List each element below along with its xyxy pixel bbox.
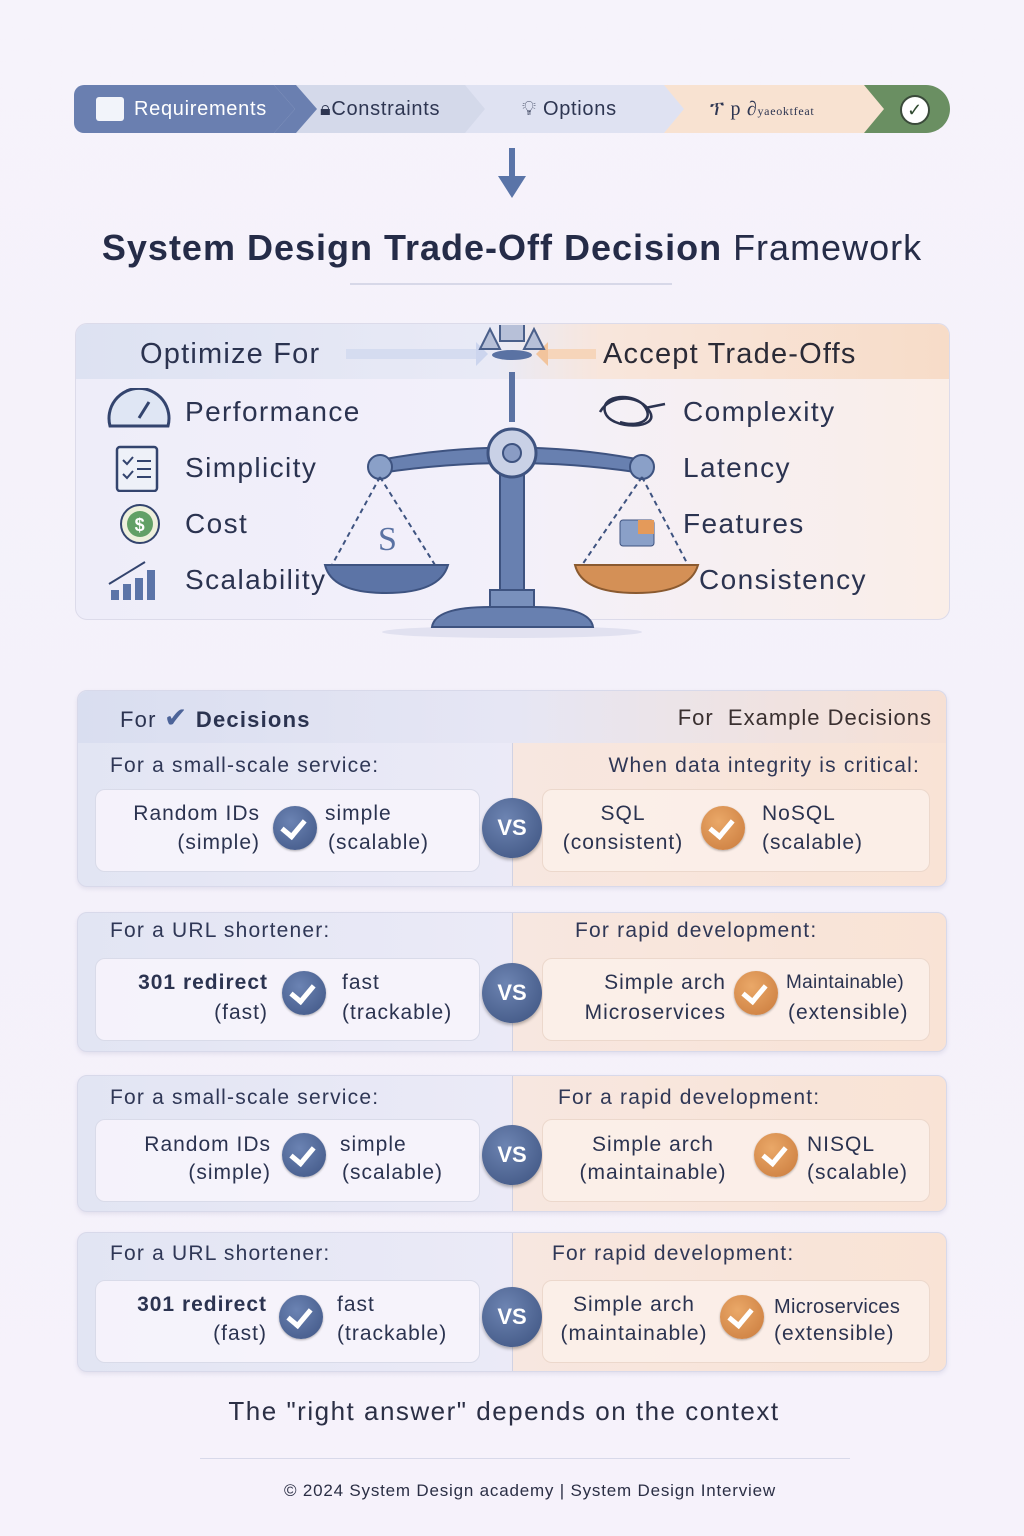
text: For a URL shortener: [110, 919, 330, 942]
vs: VS [497, 980, 527, 1005]
arrows [346, 342, 596, 366]
step: constraints: 🔒︎Constraints [320, 98, 440, 120]
arrow down [498, 148, 526, 198]
panel: optimize vs trade-offs [75, 323, 950, 620]
card: 301 redirect [95, 1280, 480, 1363]
step: done [900, 95, 930, 125]
card: random ids [95, 1119, 480, 1202]
text: (scalable) [762, 831, 863, 854]
text: fast [337, 1293, 375, 1316]
text: fast [342, 971, 380, 994]
item: latency: Latency [683, 452, 791, 483]
text: (maintainable) [560, 1322, 708, 1345]
header band [78, 691, 946, 743]
header: example decisions: For Example Decisions [678, 705, 932, 730]
text: (trackable) [337, 1322, 447, 1345]
scale illustration [324, 325, 700, 638]
step: trade-off: ፕ p ∂yaeoktfeat [710, 98, 814, 120]
text: simple [340, 1133, 407, 1156]
process bar: Requirements [134, 98, 267, 120]
process bar [74, 85, 950, 133]
item: complexity [599, 396, 835, 427]
text: For a small-scale service: [110, 1086, 379, 1109]
item: cost [120, 504, 248, 544]
title: System Design Trade-Off Decision Framework [102, 227, 922, 268]
text: Microservices [585, 1001, 726, 1024]
text: Microservices [774, 1296, 900, 1318]
card: random ids [95, 789, 480, 872]
text: 301 redirect [137, 1293, 267, 1316]
card: 301 redirect [95, 958, 480, 1041]
vs: VS [497, 815, 527, 840]
text: (simple) [177, 831, 260, 854]
vs [482, 798, 542, 858]
text: For rapid development: [575, 919, 817, 942]
footer: © 2024 System Design academy | System Design Interview [284, 1481, 776, 1500]
step: done: ✓ [907, 100, 923, 120]
item: cost: Cost [185, 508, 248, 539]
text: (scalable) [328, 831, 429, 854]
item: features: Features [683, 508, 805, 539]
right list [599, 396, 867, 595]
item: complexity: Complexity [683, 396, 835, 427]
heading: accept trade-offs: Accept Trade-Offs [603, 338, 857, 370]
text: For rapid development: [552, 1242, 794, 1265]
vs: VS [497, 1142, 527, 1167]
decision row 4 [77, 1232, 947, 1372]
text: For a rapid development: [558, 1086, 820, 1109]
decision row 2 [77, 912, 947, 1052]
item: scalability [108, 561, 326, 600]
card: simple arch [542, 958, 930, 1041]
item: consistency: Consistency [699, 564, 867, 595]
tagline: The "right answer" depends on the context [228, 1396, 780, 1426]
text: Random IDs [133, 802, 260, 825]
text: (fast) [213, 1322, 267, 1345]
vs [482, 1287, 542, 1347]
header: decisions: For ✔ Decisions [120, 702, 311, 733]
text: (scalable) [807, 1161, 908, 1184]
text: (consistent) [563, 831, 683, 854]
text: Simple arch [604, 971, 726, 994]
text: SQL [600, 802, 646, 825]
item: performance [108, 388, 361, 428]
heading: optimize for: Optimize For [140, 338, 320, 370]
item: scalability: Scalability [185, 564, 326, 595]
text: For a small-scale service: [110, 754, 379, 777]
text: (fast) [214, 1001, 268, 1024]
vs [482, 963, 542, 1023]
text: NoSQL [762, 802, 836, 825]
text: NISQL [807, 1133, 875, 1156]
text: (maintainable) [579, 1161, 727, 1184]
decision row 1 [77, 690, 947, 887]
item: simplicity: Simplicity [185, 452, 317, 483]
text: Maintainable) [786, 972, 904, 993]
decision row 3 [77, 1075, 947, 1212]
header band [76, 324, 951, 379]
step: requirements [96, 97, 124, 121]
text: simple [325, 802, 392, 825]
text: For a URL shortener: [110, 1242, 330, 1265]
card: simple arch nisql [542, 1119, 930, 1202]
text: (extensible) [788, 1001, 909, 1024]
vs: VS [497, 1304, 527, 1329]
vs [482, 1125, 542, 1185]
left list [108, 388, 361, 600]
text: Simple arch [592, 1133, 714, 1156]
text: Random IDs [144, 1133, 271, 1156]
card: simple arch microservices [542, 1280, 930, 1363]
item: simplicity [116, 446, 317, 492]
item: cost: $ [135, 515, 145, 535]
item: performance: Performance [185, 396, 361, 427]
text: When data integrity is critical: [608, 754, 920, 777]
text: (scalable) [342, 1161, 443, 1184]
step: options: 💡︎ Options [522, 98, 617, 120]
card: sql [542, 789, 930, 872]
scale illustration: S [378, 521, 398, 558]
text: (extensible) [774, 1322, 895, 1345]
text: (trackable) [342, 1001, 452, 1024]
text: (simple) [188, 1161, 271, 1184]
text: Simple arch [573, 1293, 695, 1316]
text: 301 redirect [138, 971, 268, 994]
